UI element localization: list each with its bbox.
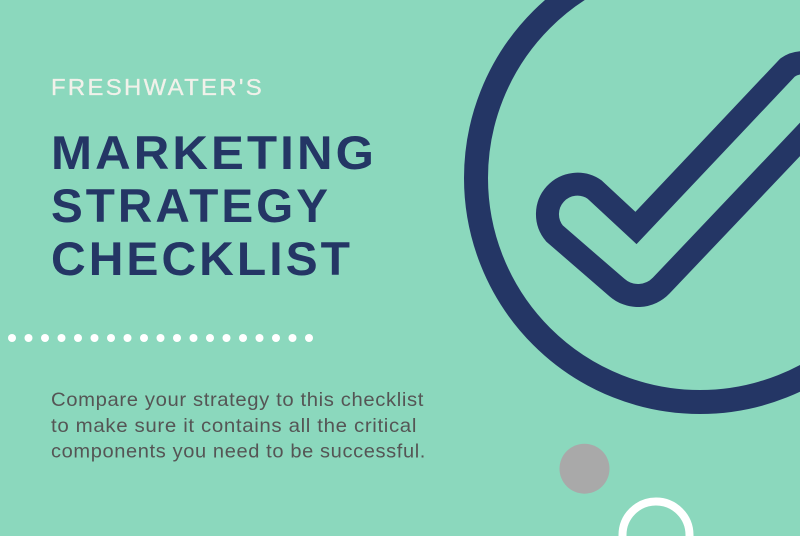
decorative white ring (622, 502, 690, 536)
decorative gray circle (560, 444, 610, 494)
description line 3: components you need to be successful. (51, 440, 426, 462)
description text (51, 389, 426, 462)
title line: checklist: CHECKLIST (51, 233, 353, 286)
description line 1: Compare your strategy to this checklist (51, 389, 424, 411)
dotted divider (8, 334, 313, 342)
description line 2: to make sure it contains all the critical (51, 415, 417, 437)
eyebrow heading: FRESHWATER'S (51, 74, 264, 100)
icon: check mark outline (547, 63, 800, 295)
icon: large circle outline (476, 0, 800, 402)
title line: marketing: MARKETING (51, 127, 377, 180)
title (51, 127, 377, 286)
title line: strategy: STRATEGY (51, 180, 331, 233)
